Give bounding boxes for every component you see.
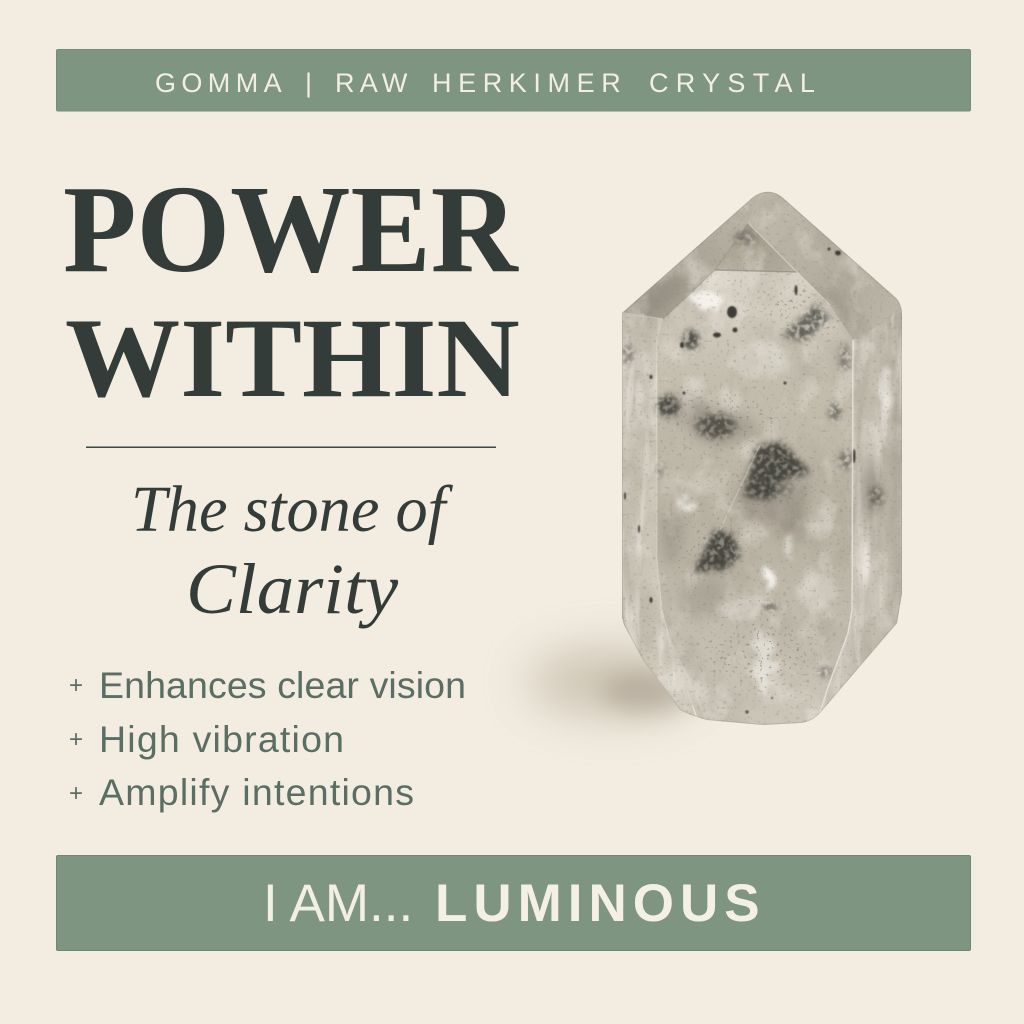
bottom banner [56, 856, 970, 950]
facet edge lines [622, 223, 853, 715]
soft underlay for dark inclusions [658, 304, 830, 572]
crystal mottling [623, 196, 894, 722]
crystal facet: right roof [748, 192, 902, 340]
infographic canvas [56, 49, 971, 951]
top banner: | [305, 68, 312, 98]
solid small inclusions [624, 248, 856, 714]
fine speckle inclusions [615, 185, 910, 730]
silhouette edge shading [622, 192, 902, 725]
top banner: CRYSTAL [649, 68, 822, 98]
subtitle: The stone of [131, 473, 453, 546]
title divider [86, 446, 496, 448]
title: WITHIN [65, 295, 520, 421]
crystal [610, 180, 910, 730]
crystal facet: left roof [622, 192, 762, 319]
subtitle: Clarity [186, 549, 399, 629]
title: POWER [63, 160, 519, 299]
benefits list [69, 664, 466, 813]
benefit: high vibration: + [69, 726, 83, 753]
benefit: clear vision: Enhances clear vision [99, 664, 466, 706]
crystal facet: front roof [715, 223, 797, 272]
top banner [56, 50, 970, 111]
subtitle [131, 473, 453, 629]
right side streaks [826, 312, 902, 704]
crystal facet: left side [622, 314, 696, 716]
grainy dark inclusions [623, 231, 883, 677]
benefit: high vibration: High vibration [99, 718, 344, 760]
benefit: clear vision: + [69, 672, 83, 699]
top banner: HERKIMER [432, 68, 627, 98]
title [63, 160, 520, 421]
crystal shadow [528, 650, 696, 714]
benefit: amplify intentions: + [69, 780, 83, 807]
crystal facet: front [657, 270, 853, 725]
top banner: RAW [335, 68, 413, 98]
left side streaks [622, 312, 675, 682]
bright highlights [636, 291, 893, 695]
benefit: amplify intentions: Amplify intentions [99, 771, 414, 813]
grey clouds [629, 269, 882, 620]
bottom banner: I AM... [263, 874, 413, 933]
bottom banner: LUMINOUS [435, 874, 766, 933]
crystal facet: right side [824, 308, 902, 708]
top banner: GOMMA [155, 68, 287, 98]
